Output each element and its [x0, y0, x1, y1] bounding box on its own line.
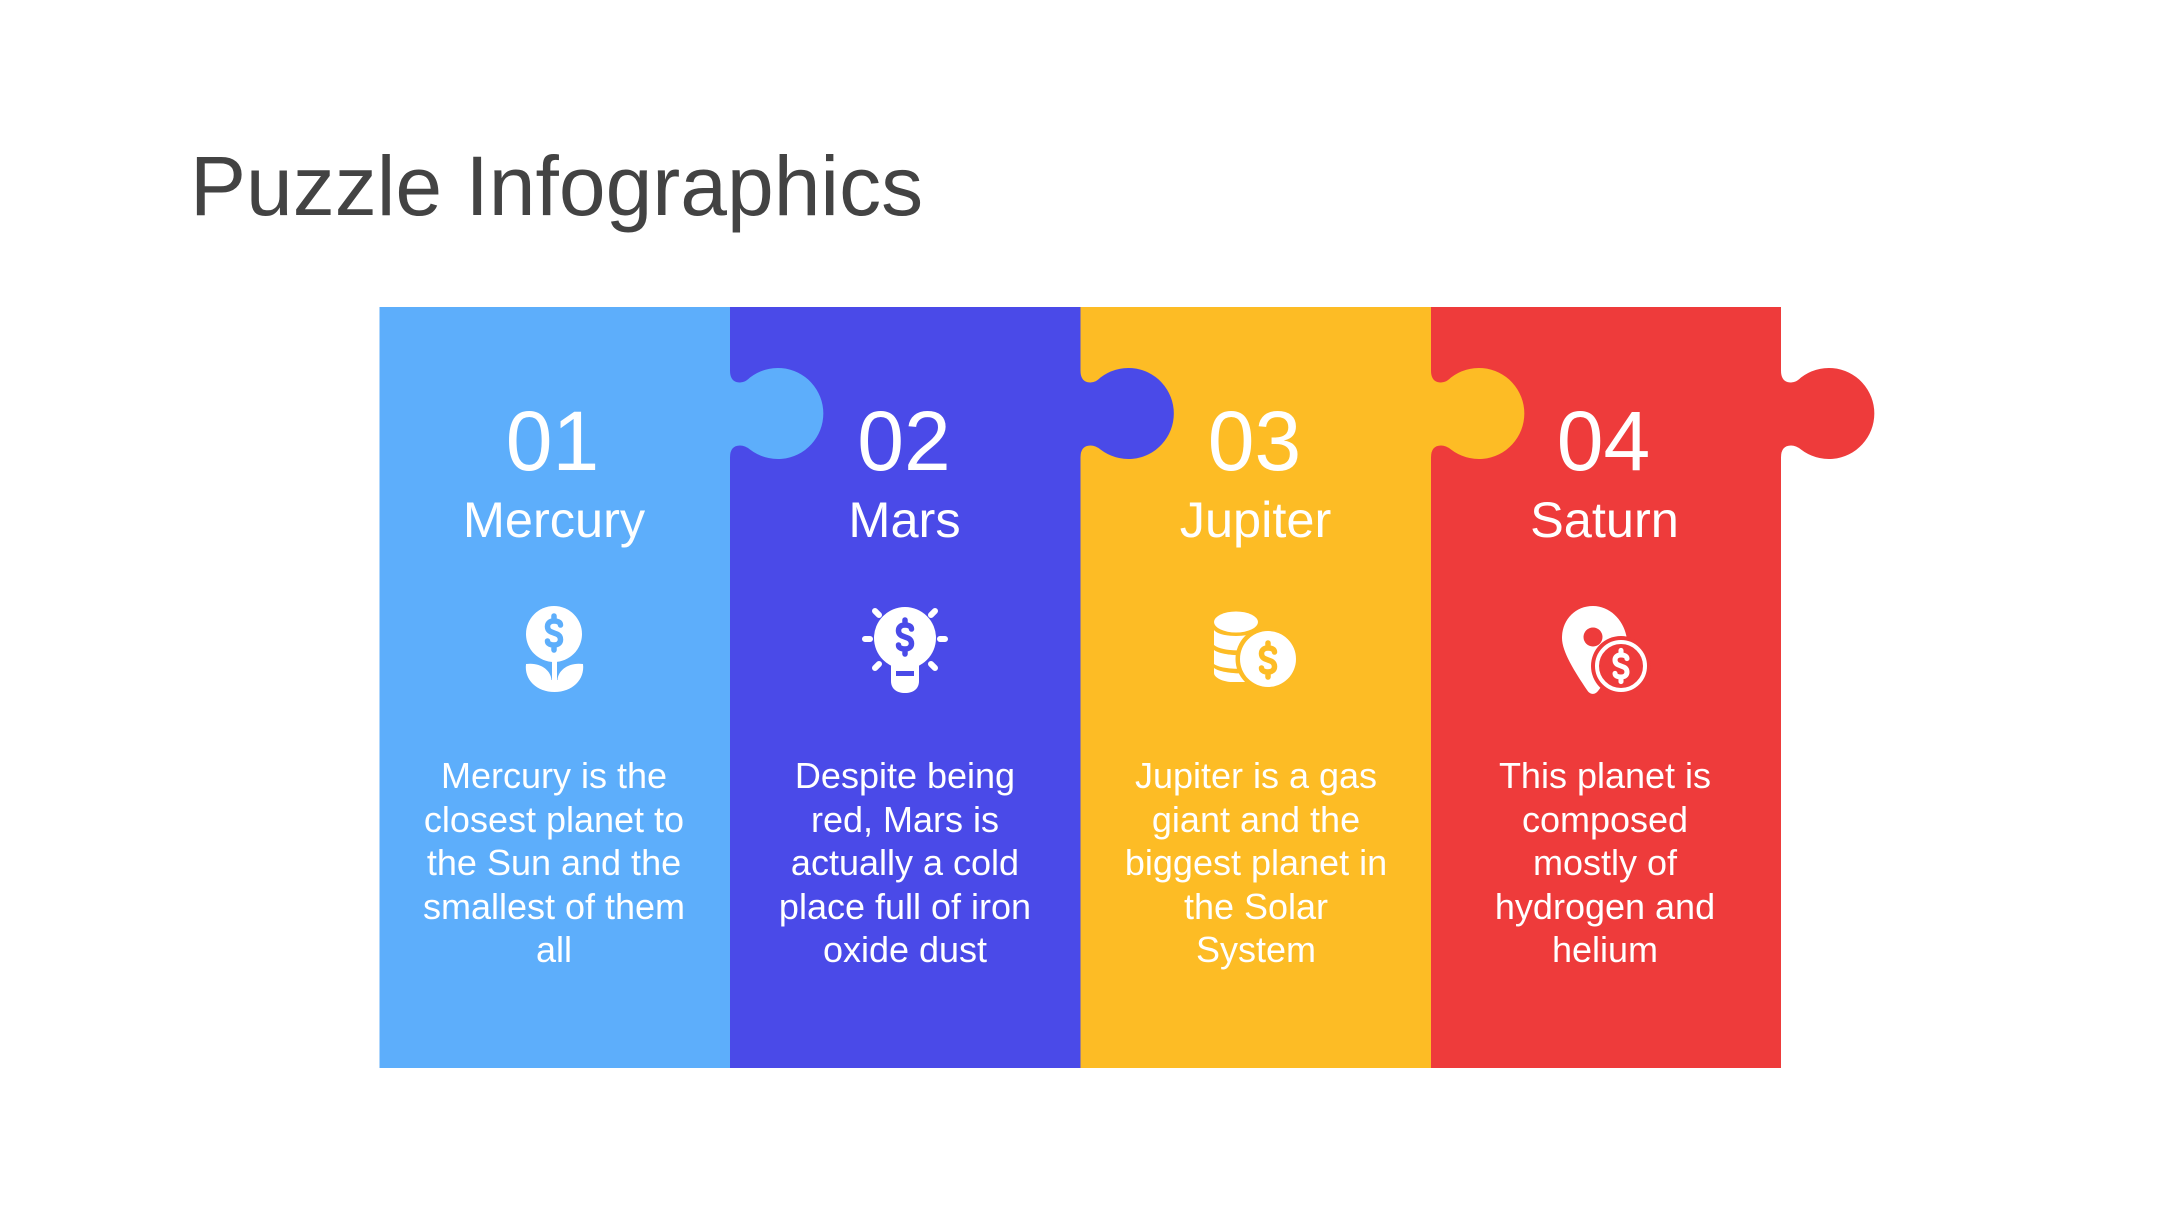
- puzzle piece: red: [1431, 307, 1874, 1068]
- description: Mars: actually a cold: [791, 842, 1019, 883]
- puzzle piece: light blue: [380, 307, 823, 1068]
- description: Saturn: This planet is: [1499, 755, 1711, 796]
- name Jupiter: Jupiter: [1180, 491, 1331, 548]
- icon: plant with dollar: [526, 606, 583, 692]
- name Mars: Mars: [848, 491, 961, 548]
- panel: 03 Jupiter: [1080, 307, 1524, 1068]
- description: Jupiter: System: [1196, 929, 1316, 970]
- description: Mars: place full of iron: [779, 886, 1031, 927]
- description: Mars: Despite being: [795, 755, 1015, 796]
- name Mercury: Mercury: [463, 491, 646, 548]
- icon: light bulb with dollar: [865, 607, 945, 693]
- number 02: 02: [857, 394, 951, 488]
- icon: location pin with dollar: [1562, 606, 1651, 696]
- panel: 02 Mars: [730, 307, 1174, 1068]
- description: Saturn: mostly of: [1533, 842, 1678, 883]
- number 03: 03: [1208, 394, 1301, 488]
- number 01: 01: [506, 394, 599, 488]
- icon: coins: [1214, 612, 1300, 692]
- description: Saturn: helium: [1552, 929, 1658, 970]
- description: Jupiter: biggest planet in: [1125, 842, 1387, 883]
- name Saturn: Saturn: [1530, 491, 1679, 548]
- number 04: 04: [1557, 394, 1650, 488]
- description: Jupiter: the Solar: [1184, 886, 1328, 927]
- panel: 04 Saturn: [1431, 307, 1874, 1068]
- puzzle piece: yellow: [1080, 307, 1524, 1068]
- puzzle piece: indigo: [730, 307, 1174, 1068]
- description: Mars: red, Mars is: [811, 799, 999, 840]
- description: Mercury: closest planet to: [424, 799, 684, 840]
- title: Puzzle Infographics: [190, 139, 923, 233]
- panel: 01 Mercury: [380, 307, 823, 1068]
- description: Jupiter: Jupiter is a gas: [1135, 755, 1377, 796]
- description: Saturn: hydrogen and: [1495, 886, 1715, 927]
- description: Mercury: smallest of them: [423, 886, 685, 927]
- description: Mercury: the Sun and the: [427, 842, 681, 883]
- description: Jupiter: giant and the: [1152, 799, 1360, 840]
- description: Mercury: all: [536, 929, 572, 970]
- description: Mercury: Mercury is the: [441, 755, 667, 796]
- description: Saturn: composed: [1522, 799, 1688, 840]
- description: Mars: oxide dust: [823, 929, 987, 970]
